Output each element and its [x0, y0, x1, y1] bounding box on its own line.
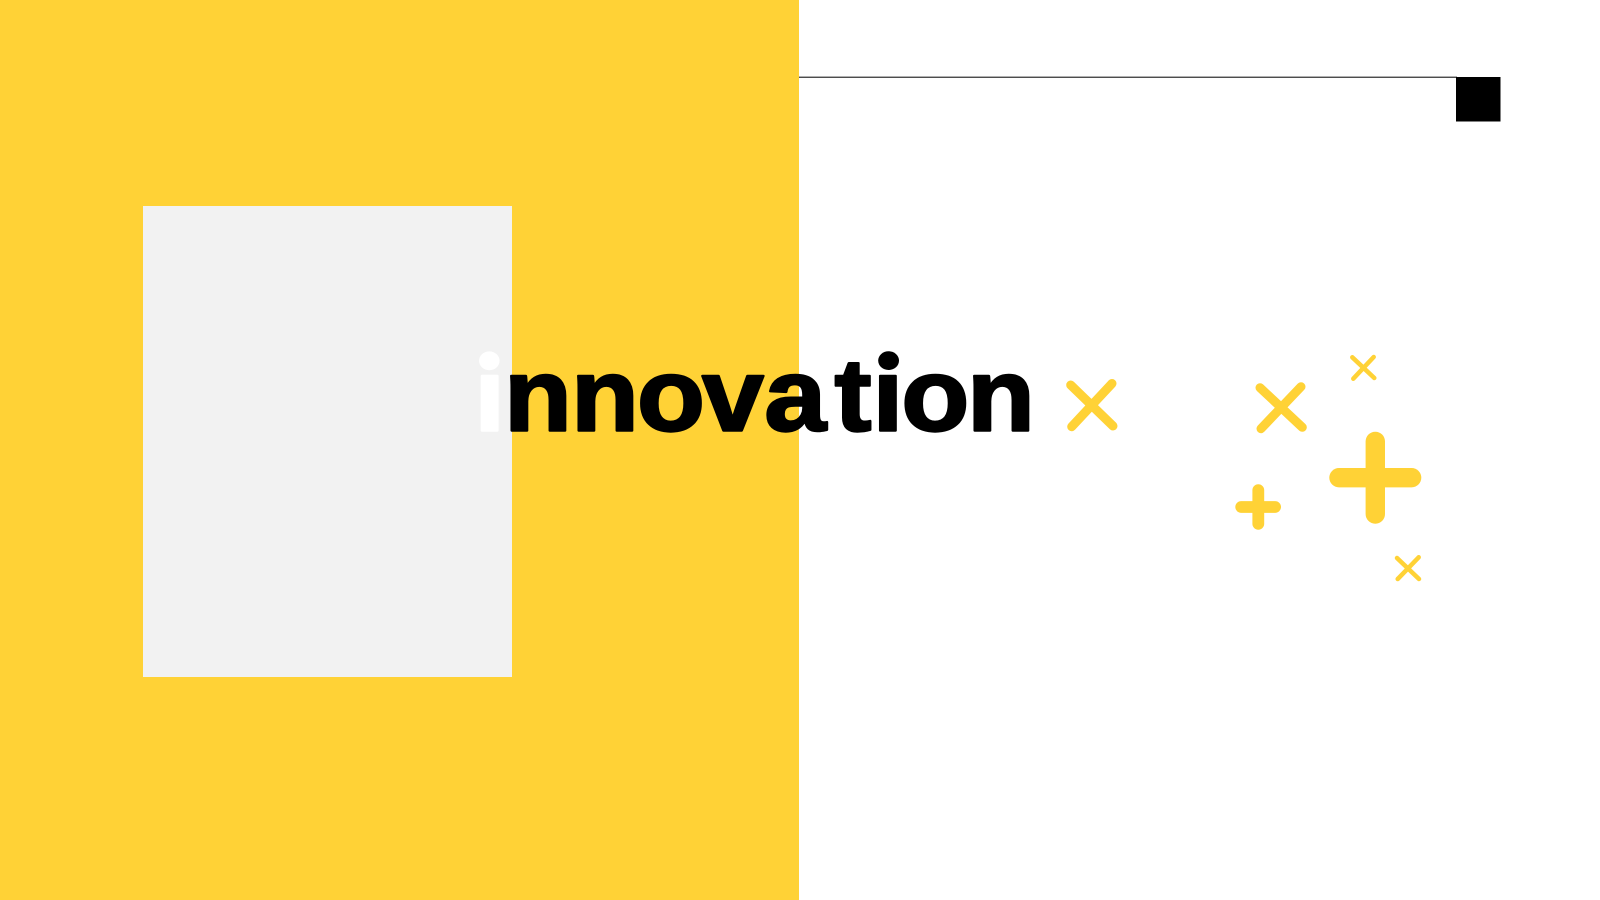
icon: cross beside title	[1071, 384, 1113, 427]
panel: yellow left half	[0, 0, 799, 900]
header rule with black square	[799, 77, 1500, 122]
icon: large cross	[1260, 387, 1302, 429]
icon: small cross top	[1352, 357, 1374, 379]
title: innovation	[479, 351, 1030, 433]
icon: large plus	[1329, 432, 1421, 524]
icon: small cross bottom	[1397, 557, 1419, 579]
icon: small plus	[1235, 484, 1281, 530]
title: innovation: innovation	[474, 337, 1035, 453]
panel: grey image placeholder	[143, 206, 512, 677]
